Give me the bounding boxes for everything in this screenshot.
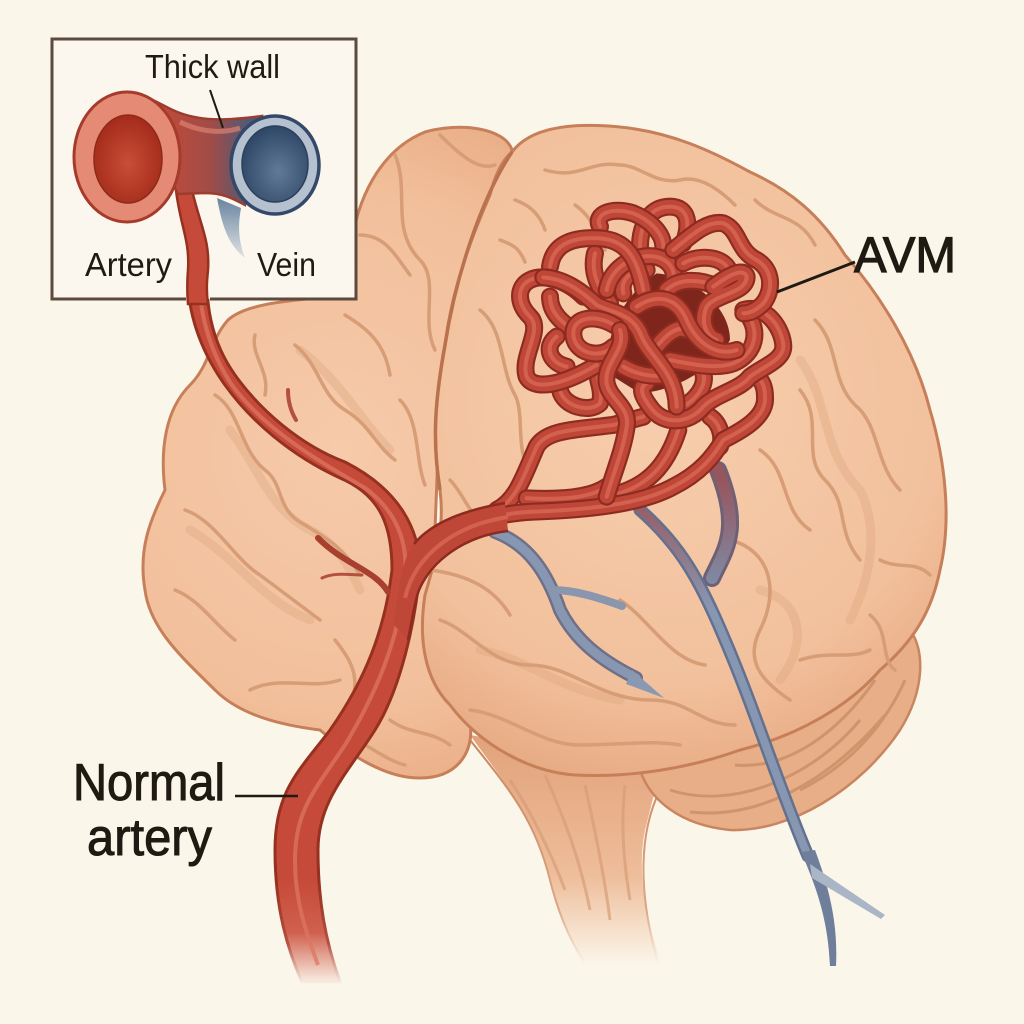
normal artery label: Normal	[73, 754, 225, 812]
tangled vessels	[520, 207, 783, 497]
feeder root highlight	[405, 517, 508, 598]
callout: normal artery	[73, 754, 298, 867]
vein: right branch	[640, 470, 885, 966]
left brain hemisphere	[143, 127, 512, 778]
label: vein: Vein	[257, 246, 316, 283]
brain stem	[470, 735, 665, 975]
small side artery branches	[288, 390, 388, 592]
inset background	[52, 39, 356, 299]
inset border	[52, 39, 356, 299]
normal artery leader line	[235, 795, 298, 797]
inset panel: vessel cross-section	[52, 39, 356, 304]
vein lumen	[242, 126, 308, 202]
AVM feeding arteries and tangle	[487, 207, 783, 520]
interhemispheric fissure	[435, 152, 512, 490]
feeder root fill	[394, 503, 508, 640]
feeder root lower edge	[408, 531, 508, 640]
leader: thick wall	[210, 90, 223, 128]
feeder root upper edge	[414, 503, 505, 544]
connecting vessel with thick wall	[127, 92, 262, 205]
artery ring	[74, 92, 180, 222]
right brain hemisphere	[422, 125, 946, 776]
vein tail	[217, 198, 245, 258]
veins draining the AVM	[495, 470, 885, 966]
artery lumen	[94, 115, 162, 203]
main AVM feeder root	[394, 503, 508, 640]
feeding arteries	[487, 377, 765, 520]
cerebellum	[640, 630, 920, 830]
label: thick wall: Thick wall	[145, 48, 280, 85]
thick wall highlight	[180, 122, 240, 131]
label: artery: Artery	[85, 246, 172, 283]
nidus dark core	[609, 273, 730, 393]
vein: left branch	[495, 532, 664, 698]
AVM leader line	[777, 262, 855, 292]
AVM label: AVM	[854, 227, 956, 283]
normal artery label: artery	[87, 809, 212, 867]
vein ring	[231, 116, 319, 214]
inset artery stem	[176, 190, 208, 304]
callout: AVM	[777, 227, 956, 292]
normal artery	[172, 205, 420, 982]
